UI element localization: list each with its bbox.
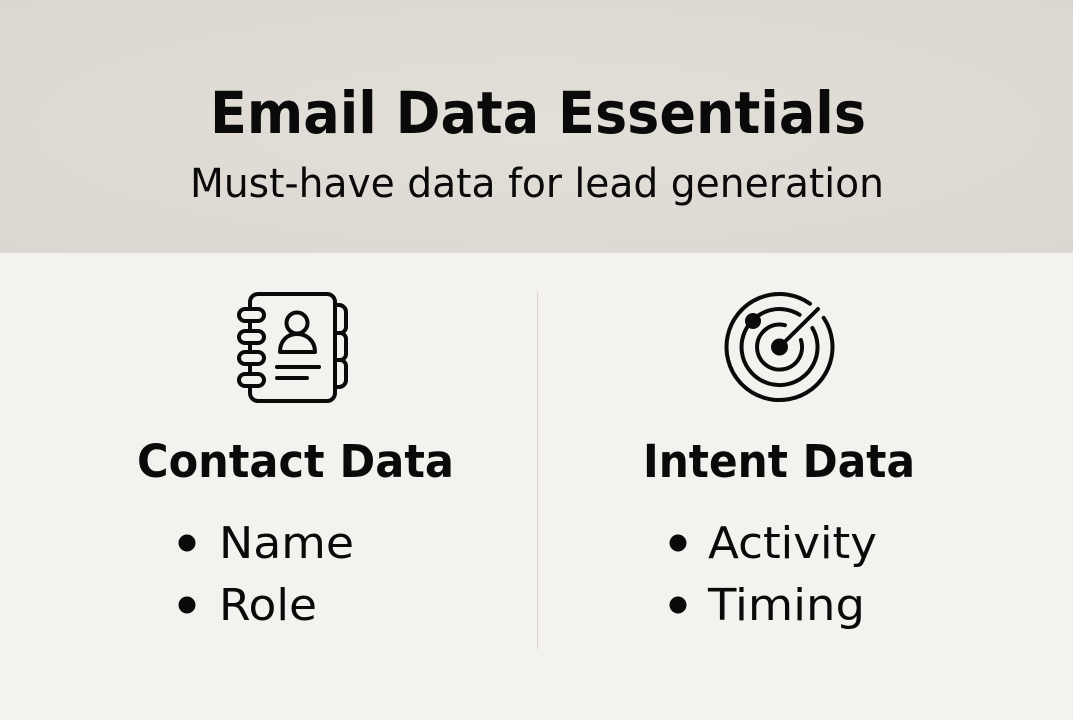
- header band: [0, 0, 1073, 253]
- heading: intent data: Intent Data: [643, 435, 915, 488]
- bullet list: contact data: [178, 518, 354, 631]
- bullet list: intent data: Timing: [707, 580, 865, 631]
- icon: radar: [726, 294, 832, 400]
- bullet list: intent data: [670, 518, 877, 631]
- bullet list: contact data: Role: [219, 580, 317, 631]
- bullet list: intent data: Activity: [708, 518, 877, 569]
- panel: intent data: [643, 294, 915, 631]
- heading: contact data: Contact Data: [137, 435, 454, 488]
- title: Email Data Essentials: [210, 79, 866, 147]
- bullet list: contact data: Name: [219, 518, 354, 569]
- subtitle: Must-have data for lead generation: [190, 161, 884, 207]
- icon: address book: [239, 294, 346, 401]
- panel: contact data: [137, 294, 454, 631]
